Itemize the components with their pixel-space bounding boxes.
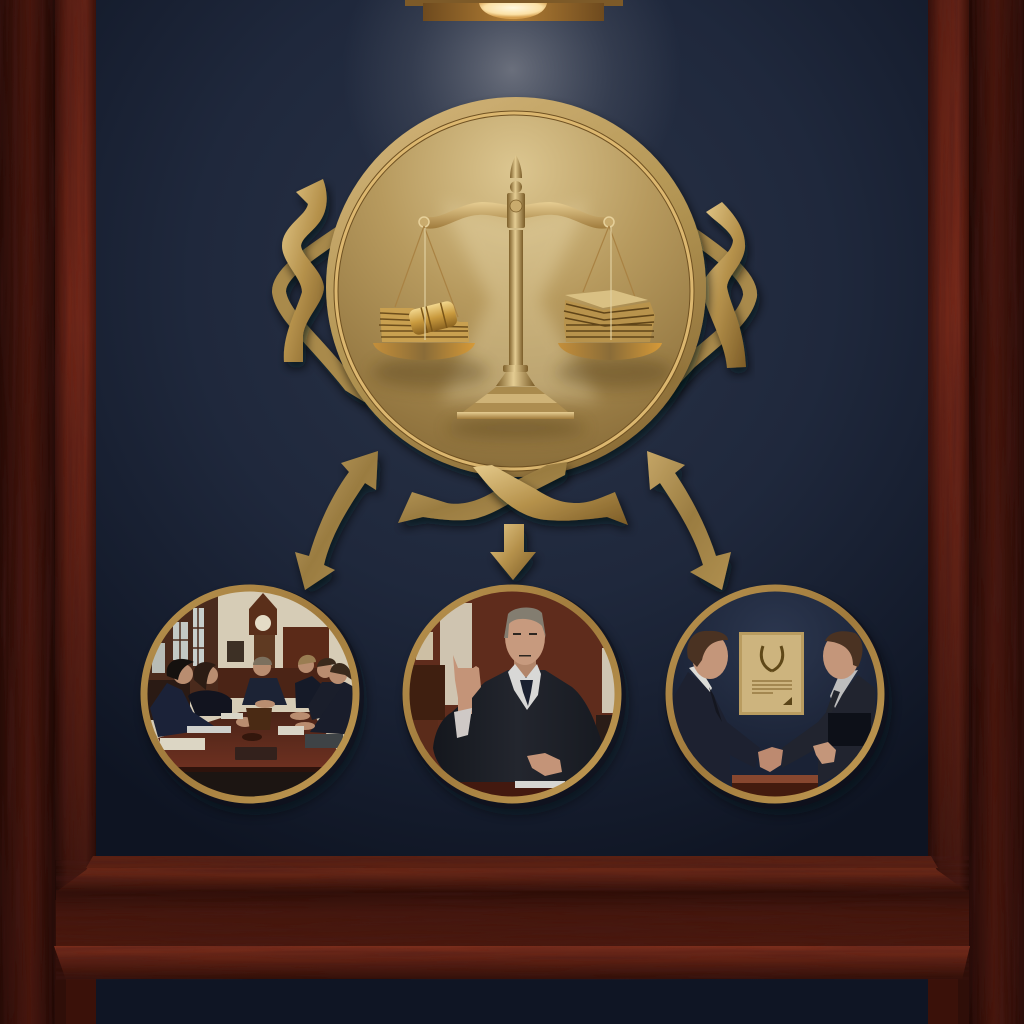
right hand bbox=[813, 742, 836, 764]
light wedge around column bbox=[440, 200, 600, 400]
faces bbox=[173, 657, 347, 730]
desk gavel ornament bbox=[242, 708, 272, 741]
papers and books bbox=[160, 713, 343, 760]
arrow: right double-headed bbox=[647, 451, 731, 590]
beam pivot block bbox=[507, 193, 525, 228]
right collar and tie bbox=[830, 670, 858, 708]
face bbox=[505, 618, 545, 665]
right man suit bbox=[782, 676, 874, 750]
neck bbox=[514, 660, 536, 677]
arrow: left double-headed bbox=[295, 451, 378, 590]
desk bbox=[460, 782, 552, 796]
judge robe bbox=[433, 670, 602, 782]
emblem: gold disc bbox=[326, 97, 706, 477]
table bbox=[158, 712, 337, 767]
lower hand bbox=[527, 753, 562, 776]
handshake bbox=[758, 747, 783, 772]
collar bbox=[508, 664, 541, 710]
framed certificate bbox=[739, 632, 804, 715]
gavel bbox=[408, 300, 458, 336]
photo: judge bbox=[400, 585, 626, 809]
emblem: lower crossed ribbon right bbox=[473, 465, 628, 525]
scale column bbox=[457, 155, 574, 419]
arrow: centre down bbox=[490, 524, 536, 580]
photo: handshake with certificate bbox=[665, 585, 889, 809]
picture lamp bbox=[405, 0, 623, 21]
emblem: second ribbon strands behind disc bbox=[279, 226, 750, 396]
windows bbox=[148, 596, 218, 694]
tie bbox=[520, 680, 533, 706]
hair bbox=[504, 607, 546, 638]
emblem: lower crossed ribbon left bbox=[398, 462, 567, 523]
books and gavel bbox=[379, 228, 469, 342]
shadows under pans bbox=[372, 356, 673, 438]
left collar and tie bbox=[689, 665, 712, 692]
photo: boardroom meeting bbox=[140, 585, 364, 809]
seated people bbox=[150, 676, 356, 737]
hair bbox=[167, 655, 352, 690]
right pan bbox=[558, 217, 662, 360]
emblem: left twisted ribbon bbox=[282, 179, 327, 362]
scale beam bbox=[424, 202, 608, 229]
emblem: right twisted ribbon bbox=[702, 202, 746, 368]
cuff bbox=[454, 708, 472, 738]
wall clock bbox=[249, 593, 277, 671]
left man suit bbox=[680, 672, 757, 746]
raised hand bbox=[453, 655, 481, 714]
folder bbox=[828, 713, 871, 746]
icon: scales of justice bbox=[373, 155, 662, 419]
right head bbox=[823, 641, 857, 679]
navy wall panel bbox=[96, 0, 928, 858]
left head bbox=[692, 640, 728, 679]
left pan bbox=[373, 217, 475, 360]
documents stack bbox=[564, 226, 655, 342]
